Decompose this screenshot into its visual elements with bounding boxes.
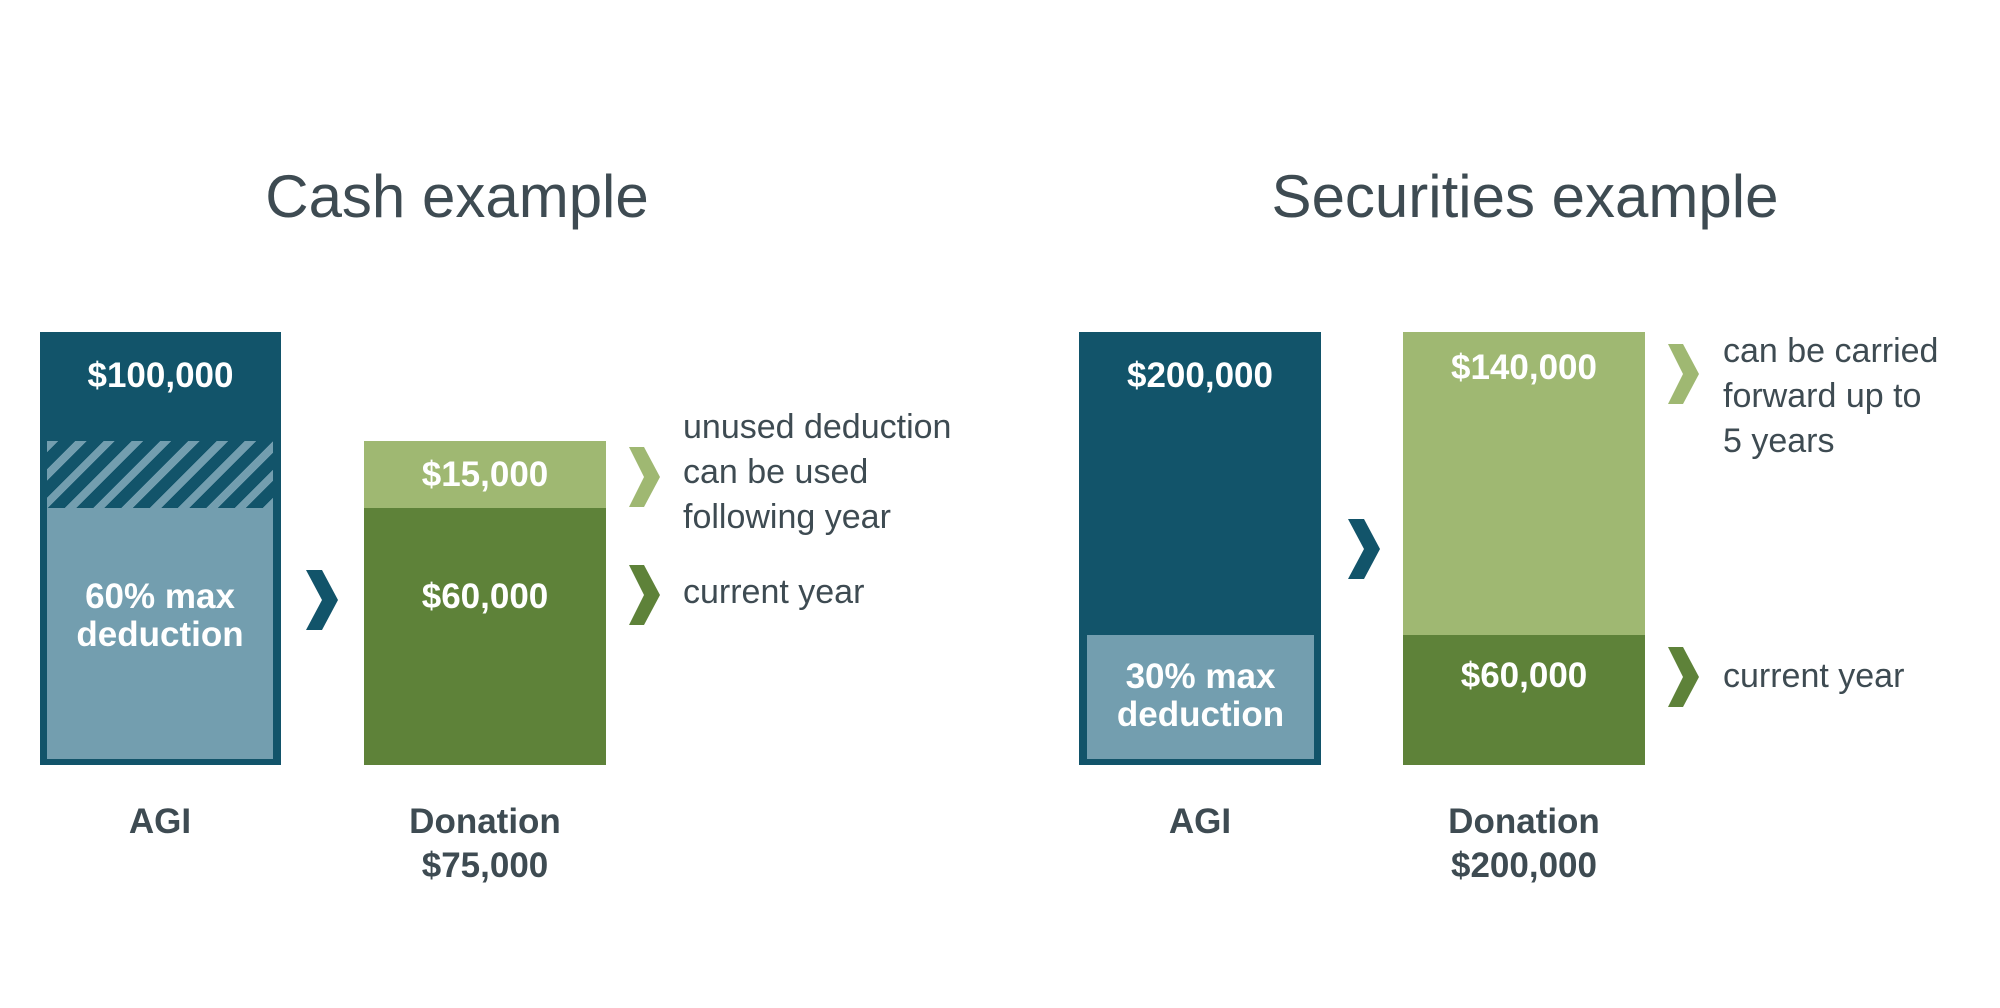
- segment: $60,000: [364, 508, 606, 765]
- arrow: current year: [629, 565, 660, 625]
- label: donation $200,000: $200,000: [1451, 846, 1597, 885]
- title: securities example: Securities example: [1272, 163, 1778, 230]
- box: 30% max deduction: 30% max: [1126, 657, 1275, 696]
- arrow: carried forward: [1668, 344, 1699, 404]
- text: carried forward: [1723, 332, 1938, 460]
- box: 60% max deduction: 60% max: [85, 577, 235, 616]
- arrow: current year securities: [1668, 647, 1699, 707]
- label: AGI securities: AGI: [1169, 802, 1231, 841]
- segment: $15,000: $15,000: [422, 455, 548, 494]
- segment: $60,000: [1403, 635, 1645, 765]
- text: unused deduction: unused deduction: [683, 408, 951, 446]
- label: donation $200,000: [1448, 802, 1600, 885]
- bar: securities donation: [1403, 332, 1645, 765]
- text: unused deduction: following year: [683, 498, 891, 536]
- text: carried forward: forward up to: [1723, 377, 1921, 415]
- segment: $140,000: [1403, 332, 1645, 635]
- arrow: cash AGI to donation: [306, 570, 338, 630]
- title: cash example: Cash example: [265, 163, 649, 230]
- segment: $15,000: [364, 441, 606, 508]
- label: donation $75,000: $75,000: [422, 846, 548, 885]
- text: current year: current year: [683, 573, 864, 611]
- text: unused deduction: [683, 408, 951, 536]
- label: donation $75,000: Donation: [409, 802, 561, 841]
- arrow: unused: [629, 447, 660, 507]
- label: donation $200,000: Donation: [1448, 802, 1600, 841]
- box: 30% max deduction: deduction: [1117, 695, 1284, 734]
- label: $200,000: $200,000: [1127, 356, 1273, 395]
- box: 60% max deduction: [47, 508, 273, 759]
- box: 30% max deduction: [1087, 635, 1314, 759]
- hatch area: [47, 441, 273, 508]
- segment: $60,000: $60,000: [1461, 656, 1587, 695]
- label: donation $75,000: [409, 802, 561, 885]
- text: carried forward: can be carried: [1723, 332, 1938, 370]
- segment: $140,000: $140,000: [1451, 348, 1597, 387]
- label: AGI: AGI: [129, 802, 191, 841]
- box: 60% max deduction: deduction: [76, 615, 244, 654]
- text: unused deduction: can be used: [683, 453, 868, 491]
- label: $100,000: $100,000: [88, 356, 233, 395]
- segment: $60,000: $60,000: [422, 577, 548, 616]
- bar: cash AGI: [40, 332, 281, 765]
- bar: securities AGI: [1079, 332, 1321, 765]
- text: carried forward: 5 years: [1723, 422, 1834, 460]
- bar: cash donation: [364, 441, 606, 765]
- text: current year securities: current year: [1723, 657, 1904, 695]
- arrow: securities AGI to donation: [1348, 519, 1380, 579]
